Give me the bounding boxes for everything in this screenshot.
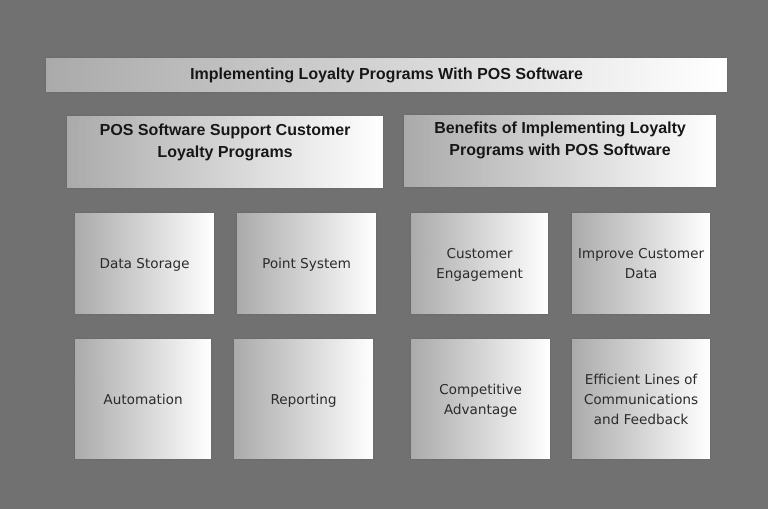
label: efficient lines: Communications xyxy=(584,392,698,408)
label: customer engagement xyxy=(436,246,523,282)
card: reporting xyxy=(234,339,373,459)
label: reporting: Reporting xyxy=(270,392,337,408)
label: efficient lines xyxy=(584,372,698,428)
title text: Implementing Loyalty Programs With POS Software xyxy=(190,66,583,82)
label: efficient lines: Efficient Lines of xyxy=(585,372,697,388)
card: efficient lines xyxy=(572,339,710,459)
card: improve customer data xyxy=(572,213,710,314)
label: customer engagement: Customer xyxy=(446,246,513,262)
panel header: POS software support xyxy=(67,116,383,188)
heading text: support: Loyalty Programs xyxy=(157,144,293,160)
label: data storage: Data Storage xyxy=(100,256,189,272)
label: competitive advantage: Competitive xyxy=(439,382,522,398)
label: improve customer data: Data xyxy=(625,266,657,282)
card: competitive advantage xyxy=(411,339,550,459)
label: improve customer data xyxy=(578,246,704,282)
label: competitive advantage xyxy=(439,382,522,418)
heading text: benefits xyxy=(434,120,686,158)
heading text: benefits: Benefits of Implementing Loyalty xyxy=(434,120,686,136)
panel header: benefits xyxy=(404,115,716,187)
heading text: benefits: Programs with POS Software xyxy=(449,142,671,158)
heading text: support: POS Software Support Customer xyxy=(100,122,350,138)
card: data storage xyxy=(75,213,214,314)
label: customer engagement: Engagement xyxy=(436,266,523,282)
card: customer engagement xyxy=(411,213,548,314)
card: automation xyxy=(75,339,211,459)
title banner xyxy=(46,58,727,92)
label: competitive advantage: Advantage xyxy=(444,402,517,418)
heading text: support xyxy=(100,122,350,160)
label: automation: Automation xyxy=(103,392,183,408)
label: efficient lines: and Feedback xyxy=(594,412,688,428)
card: point system xyxy=(237,213,376,314)
label: point system: Point System xyxy=(262,256,351,272)
label: improve customer data: Improve Customer xyxy=(578,246,704,262)
